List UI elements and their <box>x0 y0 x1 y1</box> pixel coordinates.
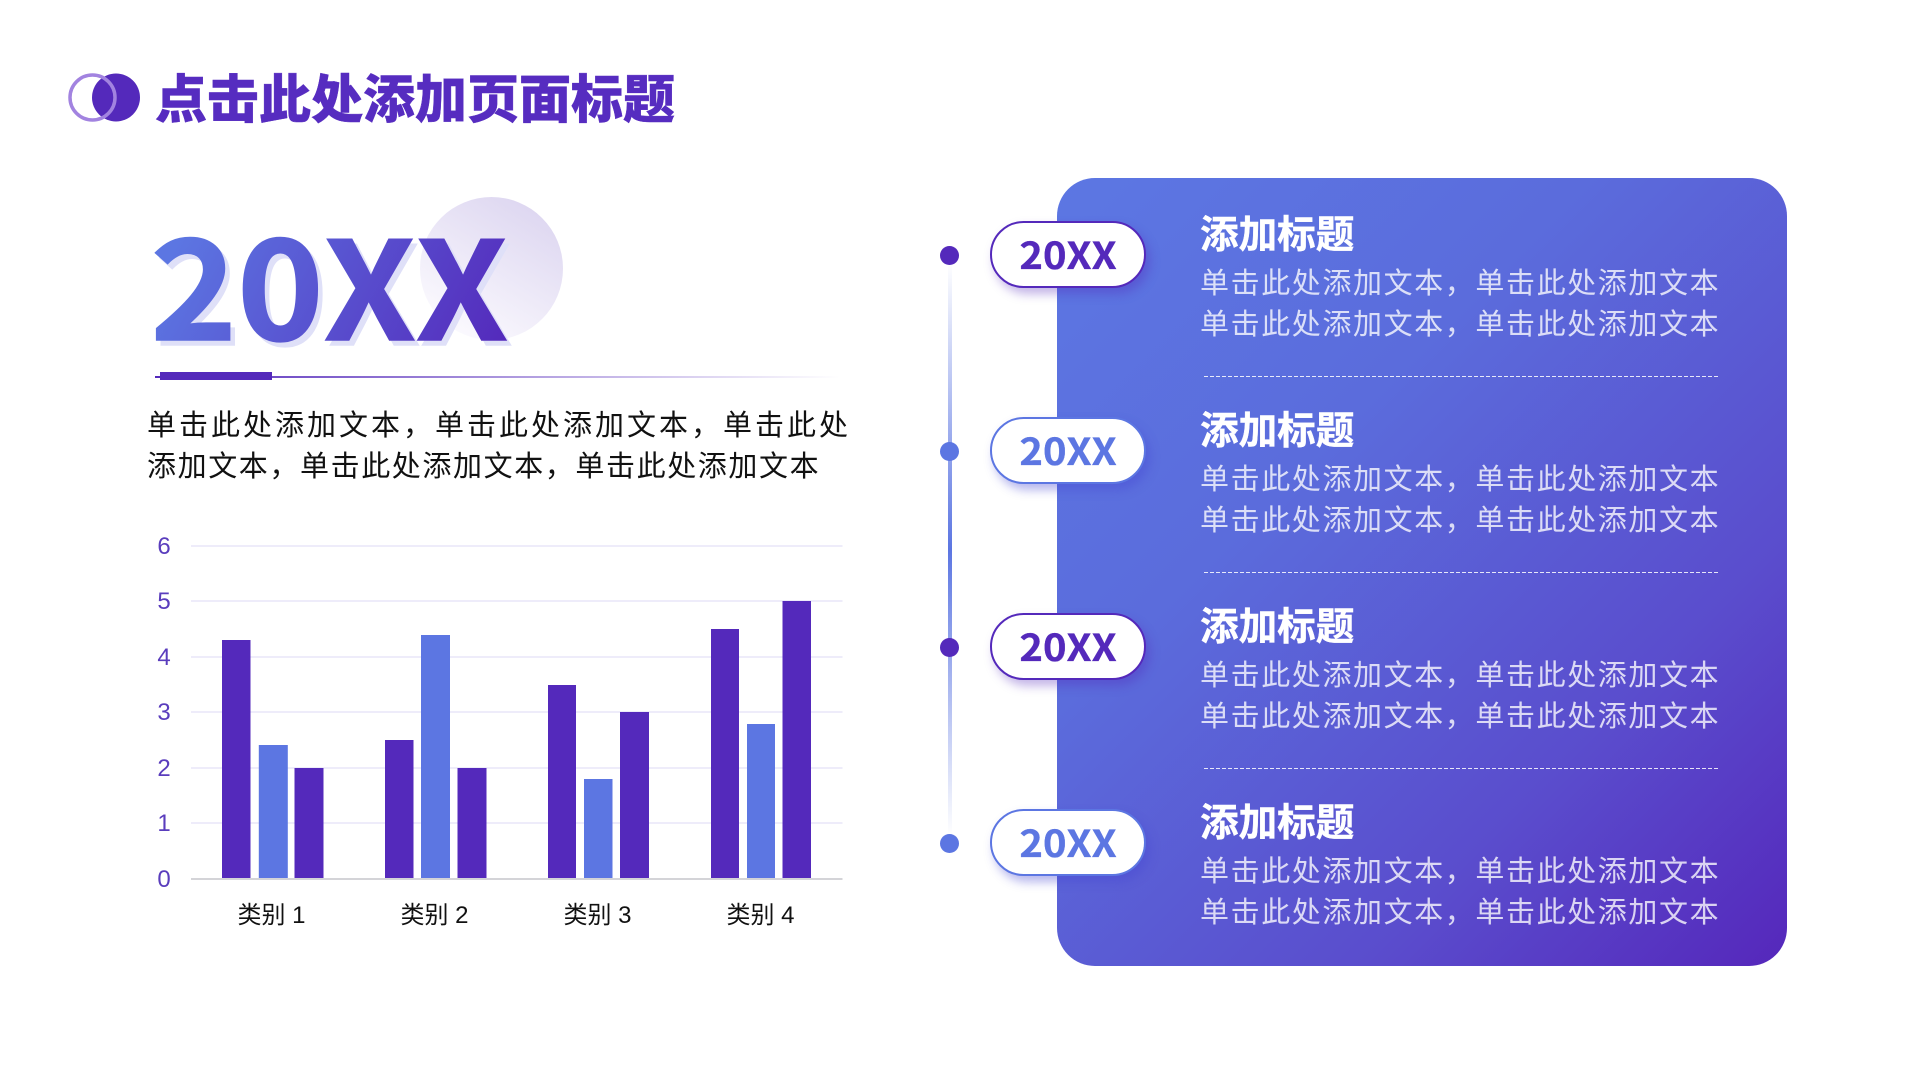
intro paragraph: 单击此处添加文本，单击此处添加文本，单击此处 <box>147 402 851 444</box>
item 3 text: 单击此处添加文本，单击此处添加文本 <box>1200 652 1720 694</box>
item 2 text <box>1200 456 1720 539</box>
year pill 1: 20XX <box>1019 226 1117 280</box>
intro paragraph <box>147 402 851 485</box>
category labels: 类别 3 <box>563 902 632 929</box>
category labels <box>237 902 795 929</box>
item 2 text: 单击此处添加文本，单击此处添加文本 <box>1200 497 1720 539</box>
item 3 heading: 添加标题 <box>1200 596 1354 652</box>
year pill 4: 20XX <box>1019 814 1117 868</box>
bars: category 2 <box>385 635 486 878</box>
item 3 text: 单击此处添加文本，单击此处添加文本 <box>1200 693 1720 735</box>
bars: category 4 <box>711 601 811 878</box>
year pill 2 <box>990 417 1146 484</box>
underline accent <box>155 372 814 380</box>
item 1 heading: 添加标题 <box>1200 204 1354 260</box>
y axis labels: 0 <box>157 866 171 893</box>
item 4 heading: 添加标题 <box>1200 792 1354 848</box>
item 2 heading: 添加标题 <box>1200 400 1354 456</box>
intro paragraph: 添加文本，单击此处添加文本，单击此处添加文本 <box>147 443 820 485</box>
timeline dot 4 <box>940 834 959 853</box>
category labels: 类别 4 <box>726 902 795 929</box>
y axis labels: 4 <box>157 644 171 671</box>
year pill 3: 20XX <box>1019 618 1117 672</box>
panel: timeline background <box>1057 178 1787 966</box>
year pill 1 <box>990 221 1146 288</box>
item 1 text: 单击此处添加文本，单击此处添加文本 <box>1200 260 1720 302</box>
timeline dot 2 <box>940 442 959 461</box>
y axis labels: 5 <box>157 588 171 615</box>
y axis labels <box>157 533 171 893</box>
year pill 3 <box>990 613 1146 680</box>
timeline dot 3 <box>940 638 959 657</box>
category labels: 类别 1 <box>237 902 306 929</box>
timeline dot 1 <box>940 246 959 265</box>
item 4 text: 单击此处添加文本，单击此处添加文本 <box>1200 889 1720 931</box>
item 4 text <box>1200 848 1720 931</box>
year pill 2: 20XX <box>1019 422 1117 476</box>
item 2 text: 单击此处添加文本，单击此处添加文本 <box>1200 456 1720 498</box>
year pill 4 <box>990 809 1146 876</box>
y axis labels: 1 <box>157 810 171 837</box>
bars: category 3 <box>548 685 649 878</box>
y axis labels: 6 <box>157 533 171 560</box>
icon: overlapping circles logo <box>68 73 140 122</box>
bars: category 1 <box>222 640 324 878</box>
timeline line <box>948 262 952 836</box>
item 1 text <box>1200 260 1720 343</box>
y axis labels: 3 <box>157 699 171 726</box>
title: 点击此处添加页面标题 <box>155 58 675 133</box>
item 3 text <box>1200 652 1720 735</box>
category labels: 类别 2 <box>400 902 469 929</box>
y axis labels: 2 <box>157 755 171 782</box>
item 4 text: 单击此处添加文本，单击此处添加文本 <box>1200 848 1720 890</box>
bar chart <box>157 533 842 929</box>
item 1 text: 单击此处添加文本，单击此处添加文本 <box>1200 301 1720 343</box>
